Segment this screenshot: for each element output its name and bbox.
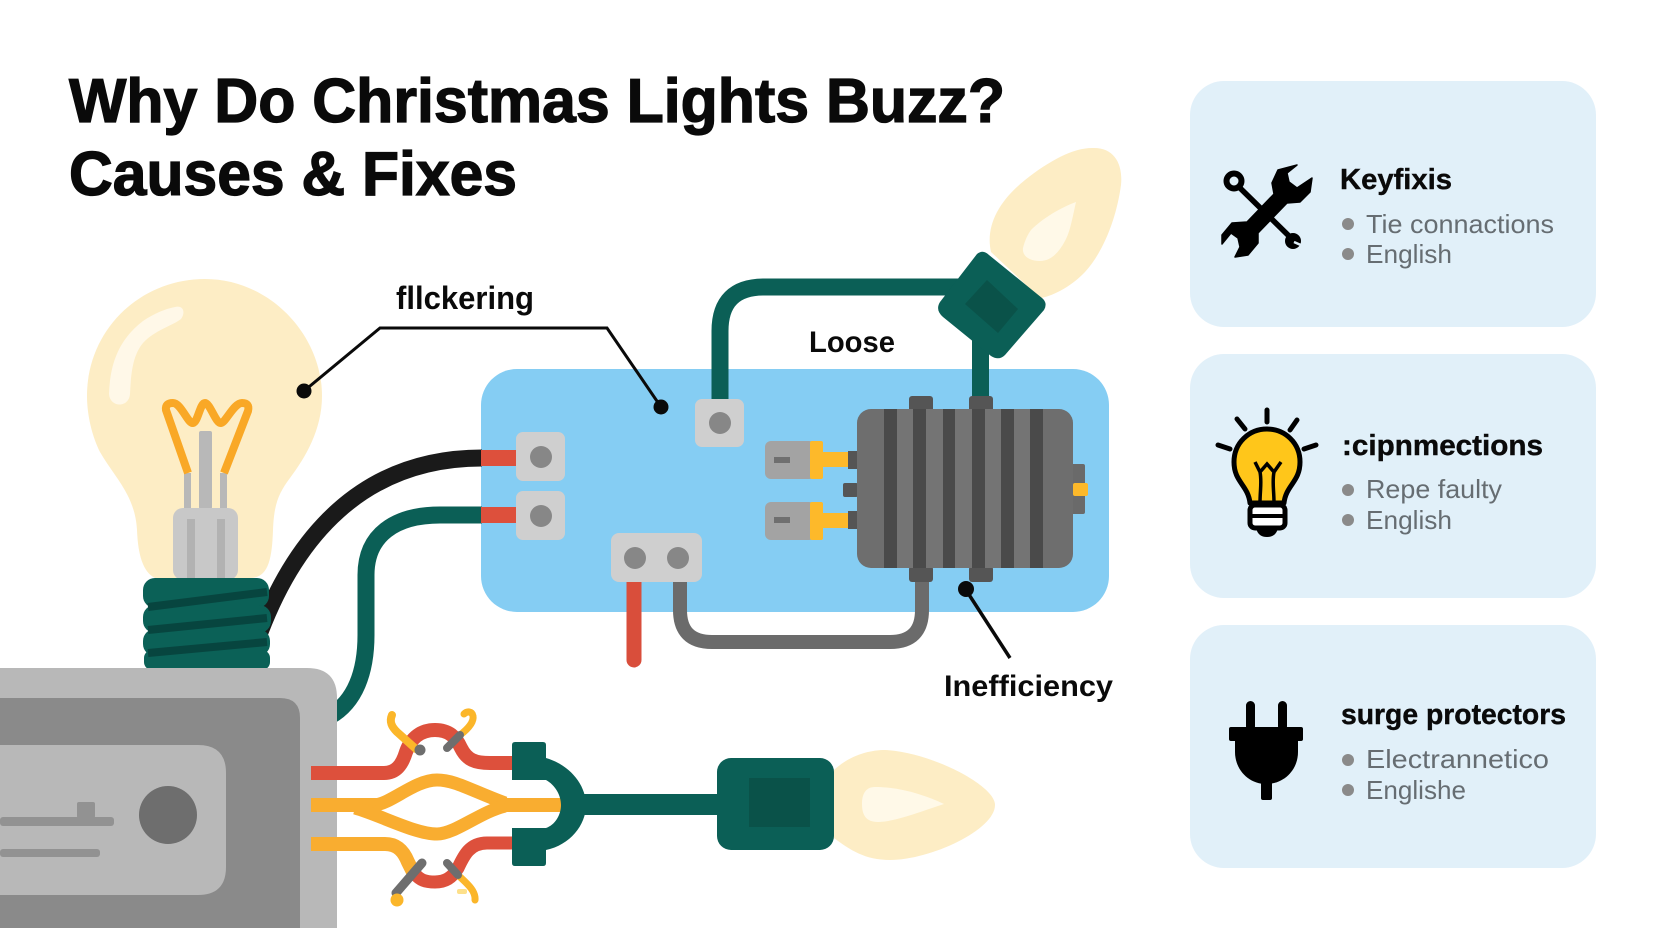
terminal: top single [695,399,744,447]
connector pins upper [765,441,848,479]
bulb glass [87,279,322,578]
wire stubs over box edge [311,766,337,851]
chip fins [884,409,1043,568]
top light flame [990,148,1121,298]
card background [1190,354,1596,598]
card background [1190,625,1596,868]
card bullet list: Electrannetico [1366,744,1549,774]
card bullet list [1342,744,1549,805]
glass highlight [109,307,183,404]
top lamp socket [938,252,1046,358]
top cord to lamp [720,287,965,400]
card bullet list: Tie connactions [1366,209,1554,239]
card bullet list [1342,474,1502,535]
box dial [139,786,197,844]
chip tabs [843,396,1085,582]
panel: circuit board [481,369,1109,612]
top cord down to chip [972,340,989,400]
card heading: surge protectors [1341,699,1566,731]
card heading: Keyfixis [1340,164,1452,196]
title [69,67,1005,209]
callout: flickering [296,280,668,414]
card heading: :cipnmections [1342,430,1543,462]
label: loose: Loose [809,326,895,359]
card bullet list: English [1366,239,1452,269]
chip body [857,409,1073,568]
chip indicator [1073,483,1088,496]
wire bundle: red and orange spliced strands [311,712,561,906]
icon: crossed tools [1222,165,1312,257]
panel: connections [1190,354,1596,598]
icon: plug [1229,701,1303,800]
card bullet list: English [1366,505,1452,535]
title: Causes & Fixes [69,140,517,209]
card background [1190,81,1596,327]
card bullet list [1342,209,1554,269]
callout: flickering: fllckering [396,280,534,316]
bottom cord [584,794,719,815]
box inner recess [0,698,300,928]
bottom lamp socket [717,758,834,850]
icon: light bulb [1218,410,1316,537]
box shell [0,668,337,928]
bulb stem base [173,508,238,580]
panel: key fixes [1190,81,1596,327]
filament [166,403,248,473]
bottom light flame [834,750,995,860]
card bullet list: Repe faulty [1366,474,1502,504]
panel: surge protectors [1190,625,1596,868]
card bullet list: Englishe [1366,775,1466,805]
callout: inefficiency: Inefficiency [944,670,1113,703]
bottom plug connector [512,742,586,866]
wire: teal from control box to terminal [330,515,482,716]
connector pins lower [765,502,848,540]
wire: black from bulb socket to terminal [260,458,482,632]
terminals: left pair [481,432,565,540]
red lead [626,580,642,660]
ballast chip [843,396,1088,582]
terminal: double [611,533,702,582]
grey lead [680,578,922,642]
control box [0,668,337,928]
switch slider [0,802,114,857]
box faceplate [0,745,226,895]
title: Why Do Christmas Lights Buzz? [69,67,1005,136]
callout: inefficiency [944,581,1113,703]
threaded socket [143,578,271,670]
chip lighter ridges [897,409,1030,568]
large light bulb [87,279,322,670]
filament supports [184,431,227,509]
